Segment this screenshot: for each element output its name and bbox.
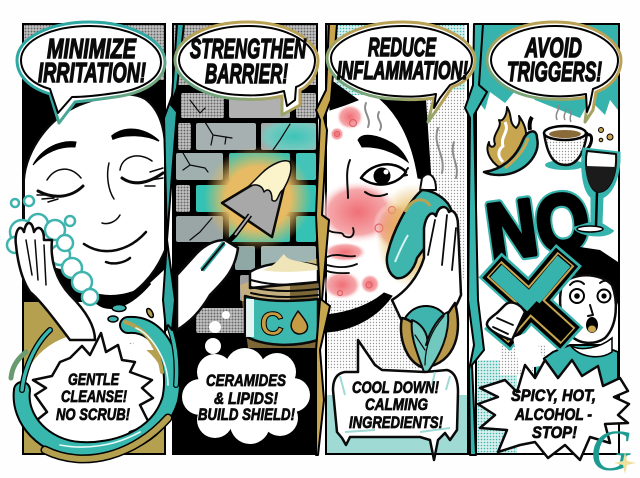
hand holding trowel	[177, 240, 238, 330]
jar of cream	[240, 254, 318, 348]
trowel	[204, 146, 312, 250]
pimples	[334, 120, 396, 296]
bubble text: STRENGTHEN	[190, 33, 306, 64]
bubble text: BARRIER!	[205, 58, 288, 89]
thought cloud	[182, 348, 310, 444]
leaf icon	[401, 303, 458, 372]
chili pepper	[484, 117, 538, 175]
starburst text	[511, 386, 596, 442]
eyebrow: left	[33, 142, 76, 165]
ice pack	[376, 184, 452, 288]
cloud text	[198, 371, 295, 424]
speech bubble: avoid triggers	[487, 22, 621, 122]
wine glass	[575, 149, 619, 235]
hair	[328, 78, 431, 180]
burst text	[56, 370, 130, 424]
big X	[490, 255, 572, 340]
lightning divider 1	[163, 24, 184, 330]
neck	[92, 270, 164, 345]
hand holding ice pack	[392, 207, 461, 360]
thought dots	[205, 311, 230, 354]
ear	[420, 174, 436, 190]
small bubbles	[598, 128, 613, 142]
lightning divider 2	[316, 24, 337, 455]
burst: gentle cleanse	[33, 333, 153, 445]
hand holding X	[487, 303, 545, 370]
bubble text: AVOID	[524, 32, 582, 63]
cloud text: BUILD SHIELD!	[198, 405, 295, 424]
bubble text: REDUCE	[368, 32, 436, 62]
speech bubble: minimize irritation	[17, 22, 165, 123]
bubble text	[337, 32, 468, 85]
person	[535, 247, 618, 400]
bubble text	[190, 33, 306, 89]
bubble text: IRRITATION!	[38, 57, 146, 88]
big NO: NO	[481, 175, 595, 277]
flame	[487, 107, 526, 170]
jar of cream: C	[260, 305, 284, 342]
nose and lips	[327, 228, 357, 273]
frosty callout	[333, 340, 458, 460]
callout text	[349, 378, 443, 432]
eye	[347, 160, 408, 198]
starburst text: ALCOHOL -	[514, 405, 592, 424]
burst text: CLEANSE!	[61, 387, 127, 406]
cheek redness	[316, 104, 417, 300]
brow	[358, 135, 408, 162]
nose	[102, 163, 120, 224]
steam	[365, 103, 457, 178]
panel: avoid triggers	[475, 23, 629, 460]
callout text: CALMING	[365, 395, 428, 414]
panel: reduce inflammation	[316, 23, 469, 460]
speech bubble: reduce inflammation	[327, 22, 475, 122]
bubble text: MINIMIZE	[47, 33, 137, 64]
burst text: NO SCRUB!	[56, 405, 130, 424]
panel: strengthen barrier	[172, 23, 318, 455]
burst text: GENTLE	[68, 370, 119, 389]
bubble text	[38, 33, 146, 88]
face	[24, 94, 165, 301]
eyebrow: right	[112, 129, 159, 141]
panel: minimize irritation	[7, 23, 167, 455]
bubble text: INFLAMMATION!	[337, 57, 468, 85]
starburst text: STOP!	[532, 423, 577, 442]
callout text: COOL DOWN!	[352, 378, 439, 397]
brick wall	[176, 93, 316, 333]
cloud text: CERAMIDES	[206, 371, 287, 390]
eye: right closed	[120, 156, 163, 186]
big NO: NO	[481, 175, 595, 277]
bubble text	[507, 32, 602, 87]
hand	[16, 223, 95, 340]
wall cracks	[183, 100, 290, 240]
jaw	[327, 293, 392, 332]
smile	[84, 232, 146, 263]
coffee cup	[544, 105, 592, 170]
starburst text: SPICY, HOT,	[511, 386, 596, 405]
water droplets	[108, 304, 155, 322]
speech bubble: strengthen barrier	[175, 22, 318, 115]
cloud text: & LIPIDS!	[214, 389, 278, 408]
callout text: INGREDIENTS!	[349, 413, 443, 432]
starburst	[478, 360, 629, 460]
foam	[7, 196, 98, 305]
water swirl	[11, 320, 177, 459]
lightning divider 3	[465, 24, 487, 455]
eye: left closed	[37, 169, 83, 202]
